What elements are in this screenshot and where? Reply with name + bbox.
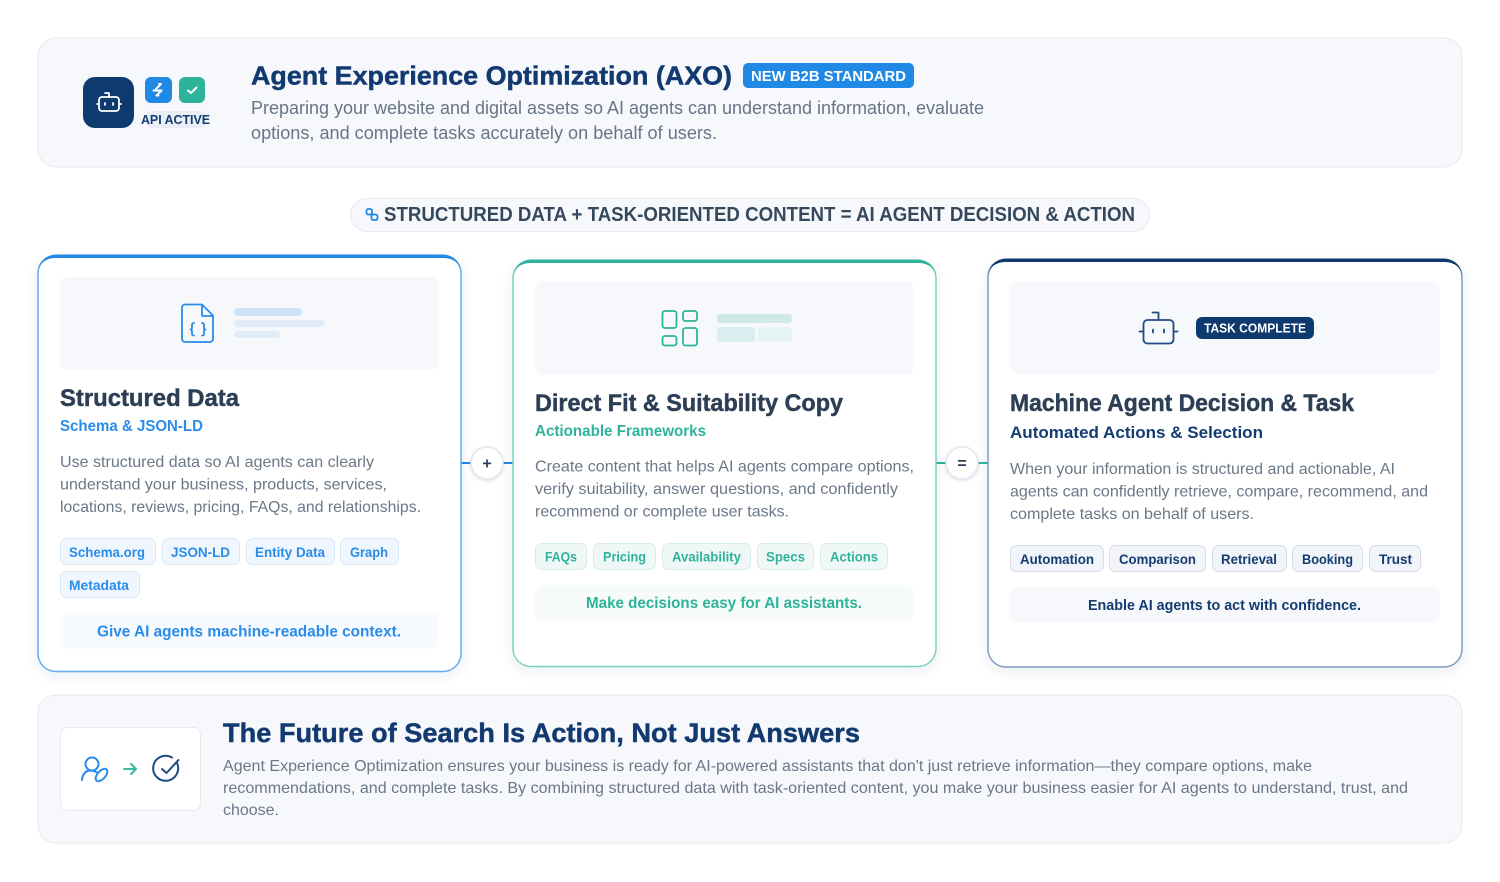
tags: Trust [1379, 551, 1412, 567]
tags: Graph [350, 544, 388, 560]
tags: Entity Data [255, 544, 325, 560]
callout [535, 585, 914, 621]
card description: understand your business, products, services, [60, 476, 387, 494]
body text: recommendations, and complete tasks. By combining structured data with task-oriented content, you make your business easier for AI agents to understand, trust, and [223, 780, 1408, 797]
card description: recommend or complete user tasks. [535, 504, 789, 520]
tags: Availability [672, 548, 741, 564]
illustration: robot and status [1010, 281, 1440, 374]
badge [743, 63, 914, 88]
formula pill: STRUCTURED DATA + TASK-ORIENTED CONTENT = AI AGENT DECISION & ACTION [384, 204, 1135, 226]
tags [60, 538, 398, 598]
panel: direct fit [512, 260, 937, 666]
tags: FAQs [545, 548, 577, 564]
tags: Actions [830, 548, 878, 564]
tags [1010, 546, 1420, 572]
connector: equals [936, 447, 988, 479]
panel: machine agent [987, 258, 1463, 667]
icon: arrow [124, 764, 136, 774]
illustration: layout grid [535, 281, 914, 375]
card subheading: Actionable Frameworks [535, 423, 706, 440]
card subheading: Automated Actions & Selection [1010, 423, 1263, 442]
formula pill [350, 198, 1150, 232]
tags: Specs [766, 548, 805, 564]
card description: When your information is structured and actionable, AI [1010, 461, 1395, 478]
connector: equals: = [957, 456, 967, 472]
body text [223, 758, 1408, 819]
card heading: Machine Agent Decision & Task [1010, 390, 1355, 417]
icon: robot tile [83, 77, 134, 128]
title: Agent Experience Optimization (AXO) [251, 60, 732, 90]
header description [251, 98, 984, 143]
tags: Metadata [69, 577, 129, 593]
header description: options, and complete tasks accurately on behalf of users. [251, 123, 717, 143]
icon: check tile [179, 77, 205, 103]
card subheading: Schema & JSON-LD [60, 418, 203, 435]
connector: plus: + [482, 456, 492, 472]
card description: locations, reviews, pricing, FAQs, and relationships. [60, 499, 421, 516]
icon: user with pen [82, 758, 109, 783]
callout: Enable AI agents to act with confidence. [1088, 597, 1361, 614]
header description: Preparing your website and digital assets so AI agents can understand information, evaluate [251, 98, 984, 118]
body text: choose. [223, 802, 279, 819]
tags: Pricing [603, 548, 646, 564]
icon: link nodes [366, 209, 378, 220]
icon tile: user to completed task [60, 728, 200, 810]
card description: complete tasks on behalf of users. [1010, 506, 1254, 523]
tags: Booking [1302, 551, 1353, 567]
callout [60, 613, 439, 649]
heading: The Future of Search Is Action, Not Just Answers [223, 718, 860, 748]
callout: Make decisions easy for AI assistants. [586, 595, 862, 612]
icon: lightning tile [145, 77, 172, 103]
card description: verify suitability, answer questions, and confidently [535, 481, 898, 498]
card description [535, 458, 914, 520]
illustration: document [60, 277, 439, 370]
card heading: Structured Data [60, 385, 240, 412]
card description: Use structured data so AI agents can clearly [60, 454, 374, 471]
connector: plus [461, 447, 513, 479]
tags: Retrieval [1221, 551, 1277, 567]
card description: Create content that helps AI agents compare options, [535, 458, 914, 476]
card description [1010, 461, 1428, 523]
status badge [1196, 317, 1314, 339]
card heading: Direct Fit & Suitability Copy [535, 390, 844, 417]
callout: Give AI agents machine-readable context. [97, 624, 401, 640]
card description: agents can confidently retrieve, compare, recommend, and [1010, 484, 1428, 500]
callout [1010, 587, 1440, 623]
tags: Automation [1020, 551, 1094, 567]
api active label: API ACTIVE [141, 112, 210, 127]
tags: JSON-LD [171, 544, 230, 560]
badge: NEW B2B STANDARD [751, 68, 906, 85]
header panel [38, 38, 1462, 167]
card description [60, 454, 421, 516]
status badge: TASK COMPLETE [1204, 320, 1306, 336]
icon: check circle [153, 756, 178, 781]
tags: Schema.org [69, 544, 145, 560]
panel: future of search [38, 695, 1462, 843]
tags: Comparison [1119, 551, 1196, 567]
panel: structured data [37, 254, 462, 672]
tags [536, 544, 888, 570]
body text: Agent Experience Optimization ensures your business is ready for AI-powered assistants that don't just retrieve information—they compare options, make [223, 758, 1312, 775]
